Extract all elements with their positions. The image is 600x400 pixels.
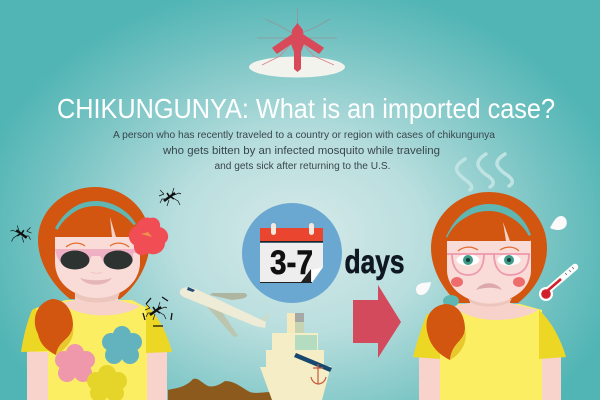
calendar badge — [242, 203, 342, 303]
girl with sunglasses — [21, 187, 172, 400]
days label: days — [344, 243, 404, 280]
eyebrows — [66, 243, 129, 247]
heat waves — [456, 154, 512, 190]
arrow — [353, 285, 401, 358]
icon: cruise ship — [260, 313, 332, 400]
flowers on shirt — [55, 344, 95, 382]
eyes — [456, 254, 520, 266]
frown — [476, 283, 502, 290]
shirt — [36, 300, 147, 400]
bangs — [446, 212, 531, 241]
neck and shoulders — [62, 285, 140, 315]
sleeves — [413, 312, 440, 359]
shirt — [430, 304, 542, 400]
icon: airplane — [180, 287, 270, 337]
hair back — [38, 187, 150, 299]
ponytail — [443, 295, 459, 307]
arms — [27, 350, 48, 400]
cheeks — [451, 277, 463, 287]
sweat drops — [416, 216, 567, 295]
sick girl — [413, 154, 566, 400]
headband — [446, 204, 531, 238]
pink glasses — [447, 254, 530, 275]
icon: brown land — [168, 379, 272, 400]
mosquito top right of girl — [159, 188, 181, 206]
bangs — [55, 207, 140, 237]
3-7: 3-7 — [270, 244, 313, 282]
title: CHIKUNGUNYA: What is an imported case? — [57, 93, 555, 124]
arms — [419, 355, 440, 400]
icon: thermometer — [539, 267, 575, 301]
neck and shoulders — [452, 290, 538, 320]
biting mosquito with marks — [143, 297, 172, 326]
description text: and gets sick after returning to the U.S. — [214, 161, 390, 172]
sleeves — [21, 308, 48, 352]
mosquito left of girl — [11, 225, 31, 243]
face — [447, 240, 531, 303]
headband — [55, 201, 136, 231]
ponytail — [35, 299, 73, 355]
face — [55, 237, 140, 298]
eyebrows — [458, 247, 519, 251]
hair back — [431, 192, 547, 303]
nose and mouth — [91, 272, 102, 274]
hibiscus flower — [129, 217, 168, 255]
description text — [113, 129, 495, 172]
description text: A person who has recently traveled to a country or region with cases of chikungunya — [113, 129, 495, 141]
icon: red mosquito on white skin — [249, 8, 345, 78]
description text: who gets bitten by an infected mosquito while traveling — [162, 145, 440, 157]
sunglasses — [55, 249, 138, 270]
